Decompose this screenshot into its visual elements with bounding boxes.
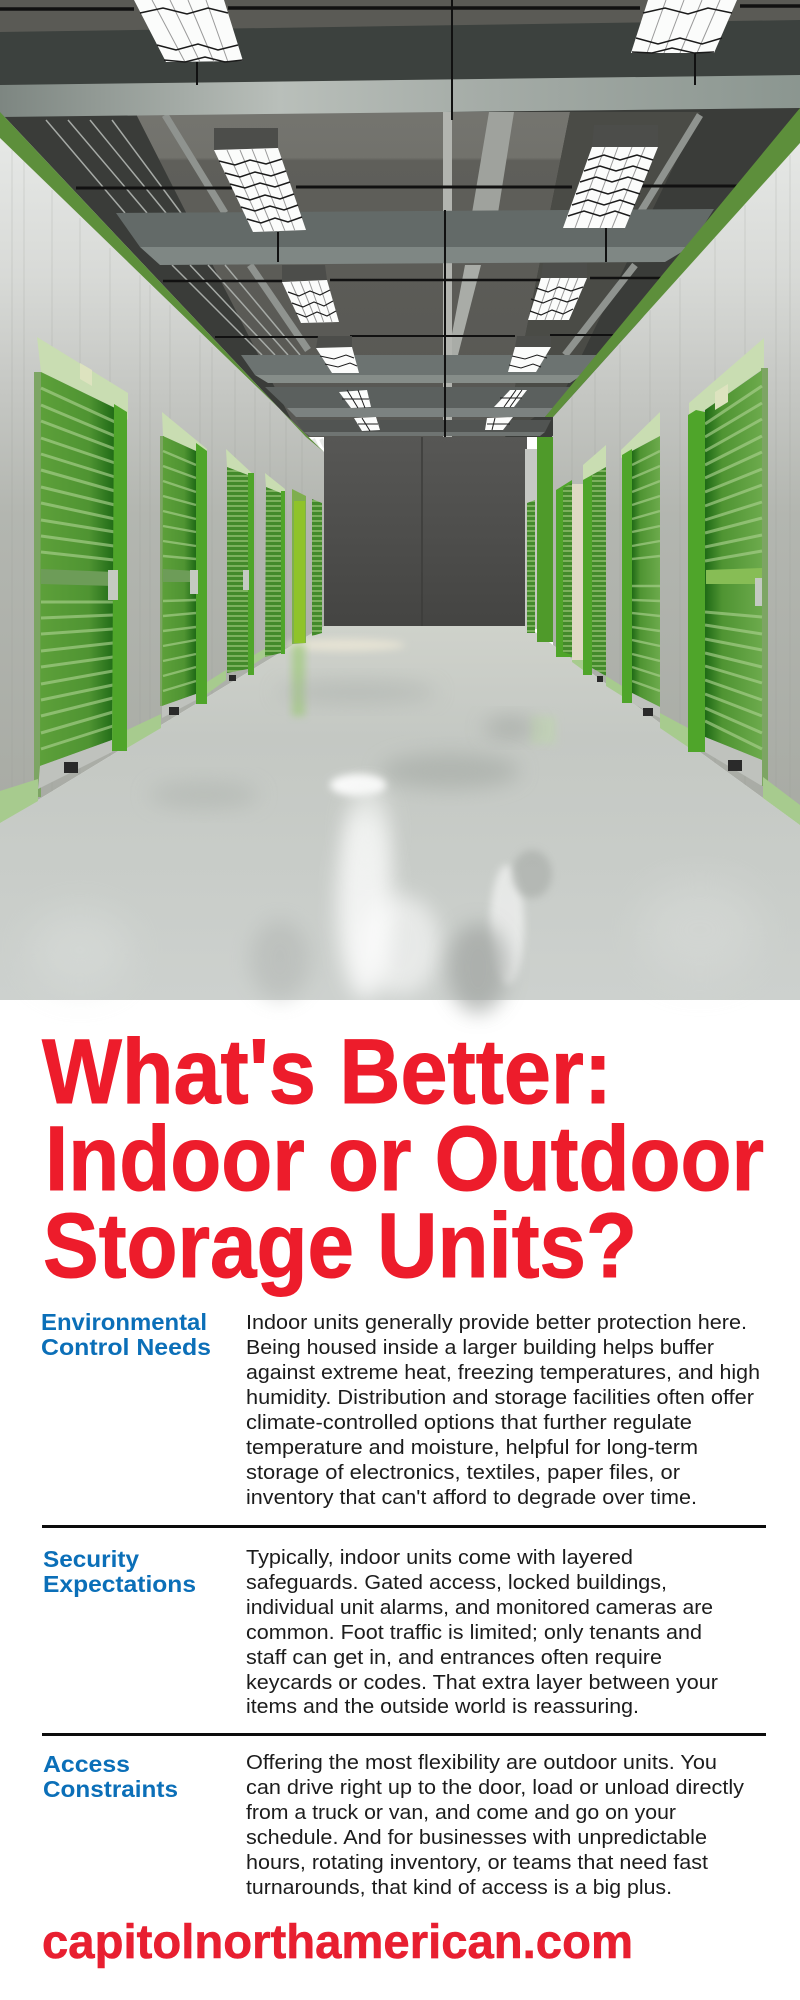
heading: Environmental [41,1309,207,1335]
heading: Access [43,1751,130,1777]
right door 3 [583,445,606,682]
title [42,1021,764,1297]
right wall [553,143,800,825]
concrete beam 2 [116,209,714,265]
body text: against extreme heat, freezing temperatures, and high [246,1362,760,1384]
light fixtures [134,0,737,448]
left door 6 [312,499,322,636]
right beige wall panel [572,484,583,660]
heading: Control Needs [41,1334,211,1360]
distant small lights [313,438,352,448]
end-of-corridor wall, right [525,449,537,629]
body text: turnarounds, that kind of access is a big plus. [246,1877,672,1899]
left wall [0,138,324,823]
light panel long ribs [152,0,720,323]
section: security expectations [43,1546,718,1718]
body text: items and the outside world is reassuring. [246,1696,639,1718]
green pillar [537,437,553,642]
body text [246,1547,718,1718]
right door 1 [688,338,768,786]
back wall seam [421,437,423,626]
body text [246,1312,760,1509]
concrete beam 1 [0,20,800,117]
concrete beam 5 [296,420,551,436]
left door 3 [226,449,254,681]
divider 1 [42,1525,766,1528]
section: environmental control needs [41,1309,760,1509]
light panel cross wires [140,8,732,431]
body text: hours, rotating inventory, or teams that need fast [246,1852,708,1874]
photo: indoor storage corridor [0,0,800,1013]
right ceiling trim [545,108,800,417]
body text: safeguards. Gated access, locked buildings, [246,1572,667,1594]
heading [43,1546,196,1597]
section: access constraints [43,1751,744,1899]
floor [0,626,800,1013]
body text: schedule. And for businesses with unpredictable [246,1827,707,1849]
left door 2 [160,412,207,718]
hanging cables [0,0,800,440]
left door 1 [34,337,128,797]
body text: climate-controlled options that further regulate [246,1412,692,1434]
body text: humidity. Distribution and storage facilities often offer [246,1387,754,1409]
body text: individual unit alarms, and monitored cameras are [246,1597,713,1619]
title line 1: What's Better: [42,1021,612,1123]
body text: Offering the most flexibility are outdoor units. You [246,1752,717,1774]
light housings [214,125,658,348]
right door 5 [527,500,535,633]
heading [43,1751,178,1802]
right door 4 [556,480,572,657]
ceiling [0,0,800,442]
right door 2 [621,412,660,718]
light panels [134,0,737,448]
body text: staff can get in, and entrances often require [246,1647,662,1669]
back wall [324,437,527,627]
body text: from a truck or van, and come and go on your [246,1802,676,1824]
left door 4 [265,473,285,657]
right baseboard [572,652,800,825]
website url footer: capitolnorthamerican.com [42,1916,633,1969]
body text: can drive right up to the door, load or unload directly [246,1777,744,1799]
left ceiling trim [0,112,324,452]
concrete beam 3 [241,355,597,383]
body text: Being housed inside a larger building helps buffer [246,1337,714,1359]
left door 5: open lit unit [292,489,306,644]
body text: inventory that can't afford to degrade over time. [246,1487,697,1509]
body text: storage of electronics, textiles, paper files, or [246,1462,680,1484]
body text [246,1752,744,1899]
body text: Indoor units generally provide better protection here. [246,1312,747,1334]
body text: keycards or codes. That extra layer between your [246,1672,718,1694]
heading: Constraints [43,1776,178,1802]
body text: common. Foot traffic is limited; only tenants and [246,1622,702,1644]
divider 2 [42,1733,766,1736]
concrete beam 4 [265,387,571,417]
title line 3: Storage Units? [43,1195,637,1297]
heading: Expectations [43,1571,196,1597]
heading [41,1309,211,1360]
left baseboard [0,648,266,823]
body text: Typically, indoor units come with layered [246,1547,633,1569]
body text: temperature and moisture, helpful for long-term [246,1437,698,1459]
heading: Security [43,1546,139,1572]
